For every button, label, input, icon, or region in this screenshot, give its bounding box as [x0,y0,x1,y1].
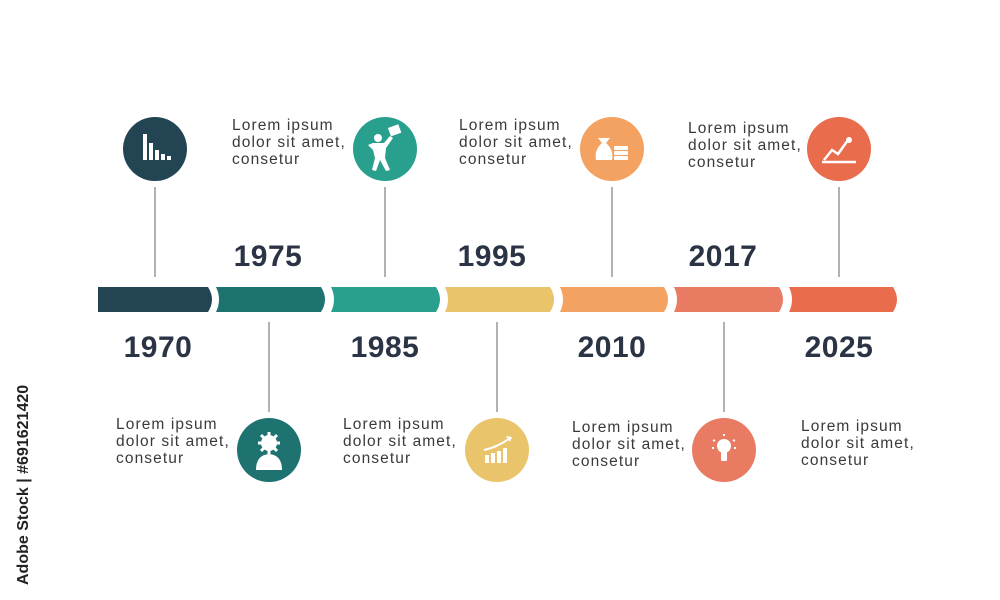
text blocks: consetur [232,151,300,168]
year labels: 1995 [458,240,526,273]
text blocks: consetur [688,154,756,171]
text blocks: consetur [343,450,411,467]
text blocks [116,117,915,470]
icon: light bulb [692,418,756,482]
text blocks: dolor sit amet, [688,137,802,154]
text blocks: consetur [572,453,640,470]
timeline bar [98,287,897,312]
text blocks: dolor sit amet, [801,435,915,452]
text blocks: consetur [801,452,869,469]
side stock id: Adobe Stock | #691621420 [15,385,32,585]
year labels: 2010 [578,331,646,364]
text blocks: dolor sit amet, [572,436,686,453]
text blocks: dolor sit amet, [343,433,457,450]
text blocks: Lorem ipsum [343,416,445,433]
year labels: 2025 [805,331,873,364]
icon: person with sign [353,117,417,181]
icon: rising bars [465,418,529,482]
text blocks: Lorem ipsum [572,419,674,436]
icon: money bag [580,117,644,181]
year labels [124,240,873,364]
year labels: 1970 [124,331,192,364]
year labels: 2017 [689,240,757,273]
connector lines [155,187,839,412]
text blocks: Lorem ipsum [232,117,334,134]
year labels: 1985 [351,331,419,364]
text blocks: dolor sit amet, [459,134,573,151]
text blocks: dolor sit amet, [232,134,346,151]
text blocks: Lorem ipsum [116,416,218,433]
icon: growth chart [807,117,871,181]
text blocks: Lorem ipsum [801,418,903,435]
text blocks: consetur [459,151,527,168]
icon: person with gear [237,418,301,482]
text blocks: dolor sit amet, [116,433,230,450]
icon: bar chart down [123,117,187,181]
year labels: 1975 [234,240,302,273]
text blocks: consetur [116,450,184,467]
text blocks: Lorem ipsum [688,120,790,137]
text blocks: Lorem ipsum [459,117,561,134]
